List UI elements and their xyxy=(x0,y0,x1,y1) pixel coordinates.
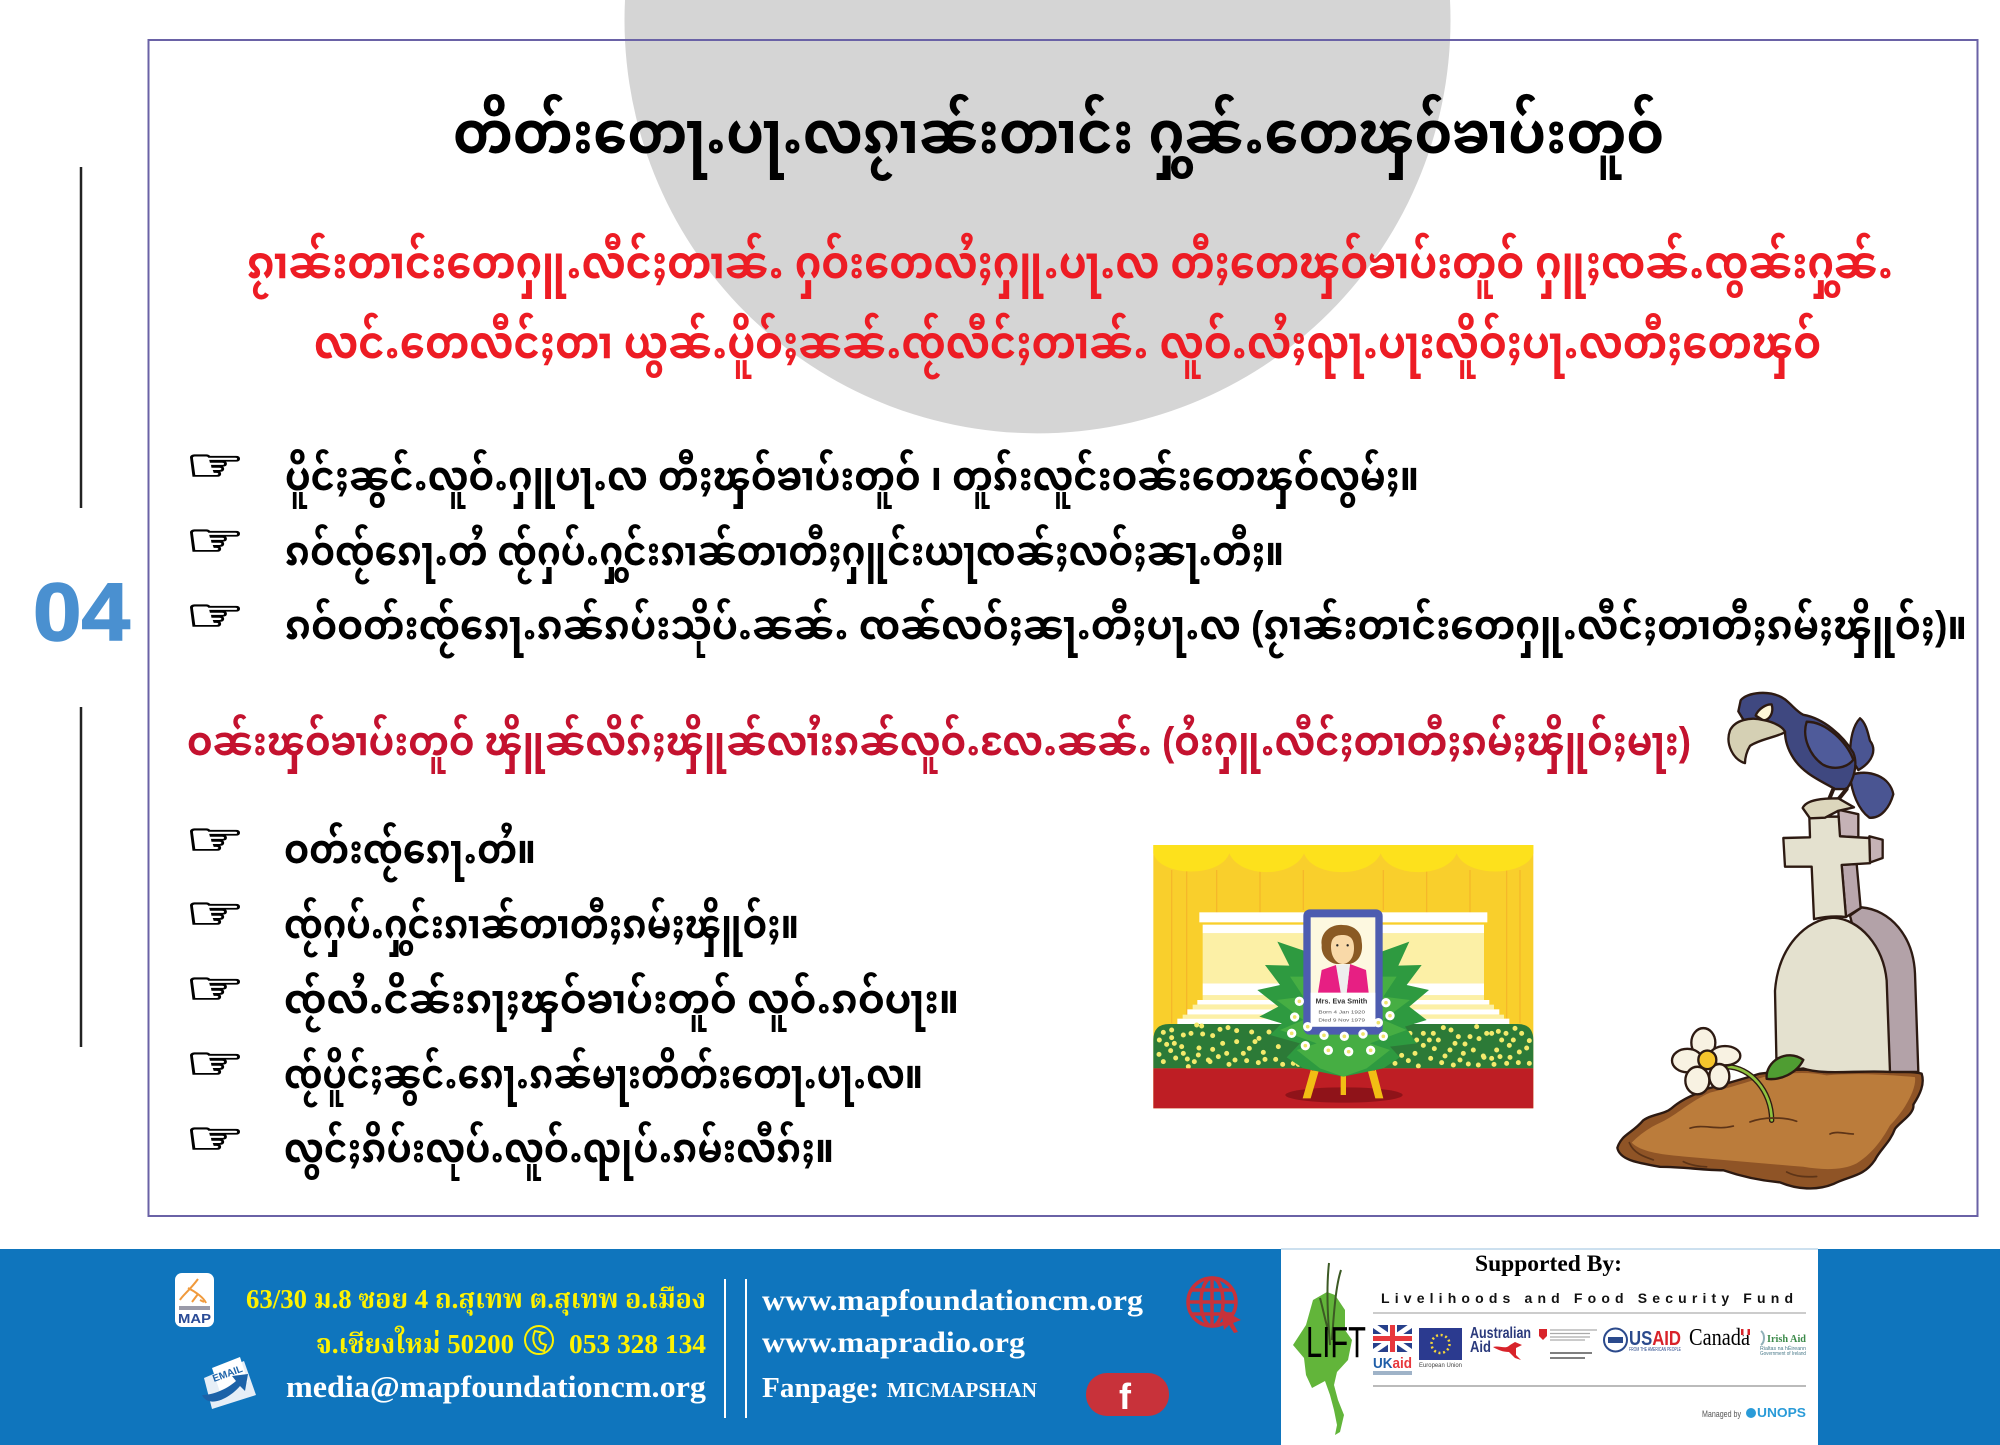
crow tail xyxy=(1850,773,1893,818)
red floor xyxy=(1153,1068,1533,1108)
crow body and head xyxy=(1738,693,1855,789)
bullet 7 xyxy=(185,1036,923,1107)
website links: www.mapradio.org xyxy=(762,1326,1025,1359)
bullet 8 xyxy=(185,1111,834,1180)
Swiss agency logo xyxy=(1539,1329,1597,1358)
crow claws xyxy=(1803,798,1854,818)
LIFT logo xyxy=(1293,1263,1366,1435)
bullet 4 xyxy=(185,812,536,882)
bullet 6: ☞ xyxy=(185,961,245,1015)
wreath leaves xyxy=(1257,942,1429,1077)
Irish Aid logo: Irish Aid xyxy=(1767,1333,1806,1345)
Australian Aid logo xyxy=(1470,1325,1531,1360)
bullet 5: ☞ xyxy=(185,886,245,940)
bullet 2: ၵဝ်ၸႂ်ၵေႃႉတႆ ၸႂ်ႁပ်ႉႁွင်းၵၢၼ်တၢတီႈႁူင်းယႃၸၼ်ႈလဝ်ႈၼႃႉတီႈ။ xyxy=(285,525,1284,584)
EU logo xyxy=(1419,1328,1462,1369)
EU logo: European Union xyxy=(1419,1362,1462,1369)
LIFT logo: LIFT xyxy=(1306,1318,1366,1367)
UNOPS credit xyxy=(1702,1405,1806,1420)
bullet 8: လွင်ႈၵိပ်းလုပ်ႉလူဝ်ႉၺုပ်ႉၵမ်းလီၵ်ႈ။ xyxy=(284,1122,834,1180)
flower bank xyxy=(1153,1024,1533,1068)
portrait frame xyxy=(1303,909,1383,1035)
grey background circle xyxy=(624,0,1451,433)
footer divider left xyxy=(724,1279,726,1418)
illustration: funeral altar xyxy=(1153,845,1533,1108)
flower centre xyxy=(1698,1051,1716,1069)
leaf xyxy=(1767,1055,1803,1079)
cross top side xyxy=(1838,810,1858,837)
UK aid logo xyxy=(1373,1325,1412,1375)
icon: email: EMAIL xyxy=(211,1364,244,1385)
flower stem xyxy=(1727,1067,1772,1120)
MAP Foundation logo xyxy=(175,1273,214,1327)
cross front xyxy=(1783,817,1870,919)
altar xyxy=(1177,912,1509,1025)
supporters panel xyxy=(1281,1249,1818,1445)
footer band xyxy=(0,1249,2000,1445)
bullet 7: ☞ xyxy=(185,1036,245,1090)
address: 63/30 ม.8 ซอย 4 ถ.สุเทพ ต.สุเทพ อ.เมือง xyxy=(246,1284,706,1317)
supported by heading: Supported By: xyxy=(1475,1251,1622,1276)
red subheading: ဝၼ်းၾဝ်ၶၢပ်းတူဝ် ၾိူၼ်လိၵ်ႈၾိူၼ်လၢႆးၵၼ်လူဝ်ႉလႄႉၼၼ်ႉ (ဝႆးႁူႉလီင်ႈတၢတီႈၵမ်ႈၾိူဝ်ႈမႃး) xyxy=(187,715,1691,773)
website links: MICMAPSHAN xyxy=(887,1378,1037,1402)
grave soil xyxy=(1617,1070,1923,1188)
fund name: Livelihoods and Food Security Fund xyxy=(1381,1290,1793,1306)
crow eye xyxy=(1756,704,1772,720)
MAP Foundation logo: MAP xyxy=(178,1311,211,1326)
icon: globe with cursor xyxy=(1188,1278,1241,1333)
bullet 6: ၸႂ်လႆႉငိၼ်းၵႃႈၾဝ်ၶၢပ်းတူဝ် လူဝ်ႉၵဝ်ပႃး။ xyxy=(284,973,959,1032)
UNOPS credit: UNOPS xyxy=(1757,1405,1806,1420)
bullet 3: ☞ xyxy=(185,588,245,642)
crow raised feathers xyxy=(1850,718,1873,770)
cross lower side xyxy=(1842,864,1861,917)
bullet 1 xyxy=(185,438,1419,508)
title: တိတ်းတေႃႉပႃႉလၵႂၢၼ်းတၢင်း ႁွၼ်ႉတေၾဝ်ၶၢပ်းတူဝ် xyxy=(453,95,1664,180)
soil top surface xyxy=(1632,1073,1915,1169)
cross arm side xyxy=(1869,836,1883,863)
section number 04: 04 xyxy=(33,567,130,658)
bullet 4: ☞ xyxy=(185,812,245,866)
portrait frame: Died 9 Nov 1979 xyxy=(1318,1017,1365,1023)
bullet 5 xyxy=(185,886,799,957)
website links: www.mapfoundationcm.org xyxy=(762,1284,1143,1317)
bullet 8: ☞ xyxy=(185,1111,245,1165)
UNOPS credit: Managed by xyxy=(1702,1409,1741,1419)
Irish Aid logo: Government of Ireland xyxy=(1760,1351,1806,1357)
crow beak xyxy=(1729,719,1785,763)
icon: email xyxy=(202,1357,256,1409)
icon: phone xyxy=(525,1326,553,1354)
USAID logo: FROM THE AMERICAN PEOPLE xyxy=(1629,1347,1681,1353)
tombstone front xyxy=(1775,918,1890,1072)
easel legs xyxy=(1303,1065,1383,1098)
bullet 7: ၸႂ်ပိူင်ႈၼွင်ႉၵေႃႉၵၼ်မႃးတိတ်းတေႃႉပႃႉလ။ xyxy=(284,1048,923,1107)
address xyxy=(246,1284,706,1359)
bullet list: before the funeral xyxy=(185,438,1967,658)
Australian Aid logo: Aid xyxy=(1470,1339,1491,1356)
bullet 1: ☞ xyxy=(185,438,245,492)
bullet 2: ☞ xyxy=(185,513,245,567)
bullet 2 xyxy=(185,513,1284,584)
Australian Aid logo: Australian xyxy=(1470,1325,1531,1342)
portrait frame: Mrs. Eva Smith xyxy=(1316,996,1368,1005)
icon: facebook: f xyxy=(1119,1376,1132,1417)
bullet list: during the funeral xyxy=(185,812,959,1180)
USAID logo xyxy=(1604,1328,1681,1353)
red intro text xyxy=(247,232,1893,379)
USAID logo: USAID xyxy=(1629,1328,1681,1350)
crow wing xyxy=(1805,722,1853,768)
wreath flowers xyxy=(1292,1001,1390,1052)
flower petals xyxy=(1672,1028,1740,1094)
crow legs xyxy=(1828,789,1847,801)
Irish Aid logo: Rialtas na hÉireann xyxy=(1760,1345,1806,1352)
Canada logo: Canada xyxy=(1689,1325,1750,1351)
email address: media@mapfoundationcm.org xyxy=(286,1369,707,1404)
address: 053 328 134 xyxy=(569,1329,706,1359)
address: จ.เชียงใหม่ 50200 xyxy=(316,1326,514,1359)
bullet 4: ဝတ်းၸႂ်ၵေႃႉတႆ။ xyxy=(284,823,536,882)
left rule bottom xyxy=(80,707,82,1047)
bullet 1: ပိူင်ႈၼွင်ႉလူဝ်ႉႁူပႃႉလ တီႈၾဝ်ၶၢပ်းတူဝ် ၊ တူၵ်းလူင်းဝၼ်းတေၾဝ်လွမ်ႈ။ xyxy=(285,450,1419,508)
illustration: crow on grave xyxy=(1617,693,1923,1188)
footer divider right xyxy=(745,1279,747,1418)
left rule top xyxy=(80,167,82,508)
content frame xyxy=(148,40,1978,1216)
bullet 5: ၸႂ်ႁပ်ႉႁွင်းၵၢၼ်တၢတီႈၵမ်ႈၾိူဝ်ႈ။ xyxy=(284,898,799,957)
bullet 3 xyxy=(185,588,1967,658)
tombstone side xyxy=(1850,907,1918,1072)
website links: Fanpage: xyxy=(762,1373,879,1404)
red intro text: လင်ႉတေလီင်ႈတၢ ယွၼ်ႉပိူဝ်ႈၼၼ်ႉၸႂ်လီင်ႈတၢၼ်ႉ လူဝ်ႉလႆႈၺႃႉပႃးလိူဝ်ႈပႃႉလတီႈတေၾဝ် xyxy=(314,312,1821,379)
Irish Aid logo xyxy=(1760,1331,1806,1357)
website links xyxy=(762,1284,1143,1404)
curtain valance xyxy=(1153,845,1533,872)
bullet 6 xyxy=(185,961,959,1032)
portrait frame: Born 4 Jan 1920 xyxy=(1318,1010,1365,1016)
UK aid logo: UKaid xyxy=(1373,1355,1412,1372)
icon: facebook xyxy=(1086,1373,1169,1417)
